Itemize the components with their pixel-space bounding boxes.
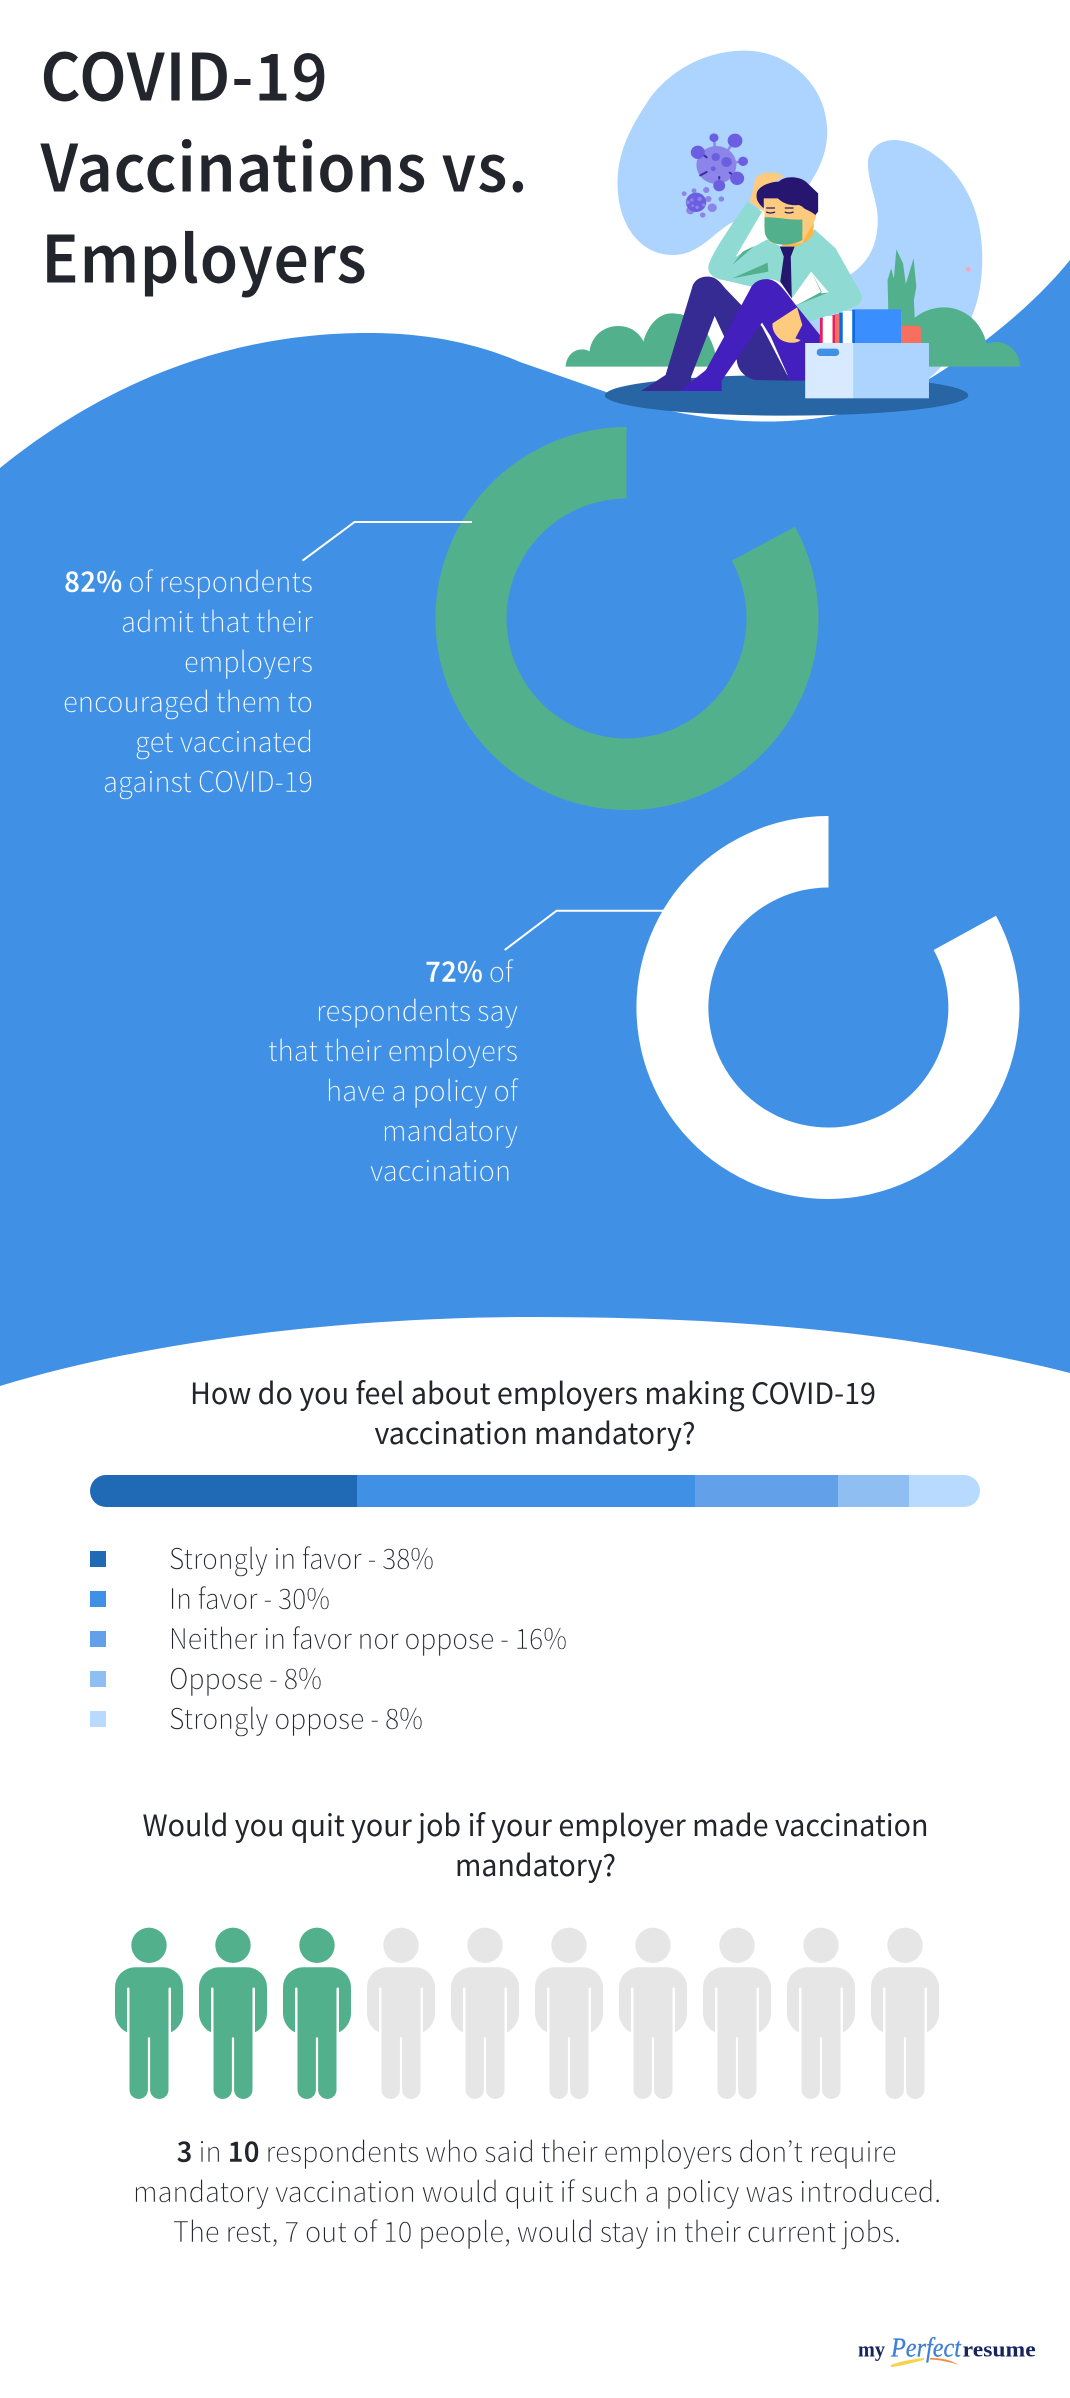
legend: opinion categories: Neither in favor nor oppose - 16% [169, 1617, 567, 1658]
title: COVID-19 [40, 25, 328, 121]
man: face mask [764, 217, 802, 245]
text: 72% statement [268, 950, 519, 1190]
icon: large virus [691, 133, 748, 191]
heading: quit question [142, 1803, 928, 1885]
heading: quit question: Would you quit your job if your employer made vaccination [142, 1803, 928, 1845]
text: 82% statement: get vaccinated [135, 720, 313, 761]
legend: opinion categories [90, 1537, 567, 1738]
text: quit statistics paragraph: The rest, 7 out of 10 people, would stay in their current jobs. [173, 2210, 901, 2251]
icon: bushes [566, 307, 1020, 367]
chart: 72% white donut [636, 816, 1019, 1199]
leader line: 72% [505, 911, 664, 950]
text: 72% statement: have a policy of [326, 1069, 519, 1110]
icon: plant [888, 249, 916, 330]
panel: blue wave background [0, 260, 1070, 1386]
text: 72% statement: 72% of [425, 950, 514, 991]
legend: opinion categories: Strongly in favor - 38% [169, 1537, 434, 1578]
text: 72% statement: that their employers [268, 1029, 518, 1070]
logo: myPerfectResume: my [858, 2337, 885, 2362]
title: Employers [41, 207, 367, 303]
heading: employer mandate question: How do you feel about employers making COVID-19 [190, 1371, 876, 1413]
icon: small virus [682, 187, 724, 218]
man: back leg [641, 277, 790, 391]
man: shirt [708, 202, 862, 324]
text: 72% statement: vaccination [370, 1149, 511, 1190]
logo: myPerfectResume: resume [963, 2337, 1036, 2362]
legend: opinion categories: Strongly oppose - 8% [169, 1697, 423, 1738]
icon: plant pot [901, 326, 921, 343]
chart: 82% green donut [435, 427, 818, 810]
heading: employer mandate question [190, 1371, 876, 1453]
man: face [764, 198, 816, 243]
man: closed eyes [766, 208, 794, 213]
text: 82% statement: admit that their [121, 600, 314, 641]
text: 82% statement: employers [184, 640, 313, 681]
text: 72% statement: mandatory [382, 1109, 518, 1150]
text: 72% statement: respondents say [316, 989, 518, 1030]
legend: opinion categories: Oppose - 8% [169, 1657, 322, 1698]
man: raised hand [750, 173, 784, 212]
text: 82% statement: encouraged them to [63, 680, 313, 721]
chart: 3 in 10 people pictogram [115, 1928, 939, 2099]
illustration: background blobs [618, 51, 982, 378]
man: tie [780, 247, 795, 298]
text: 82% statement: against COVID-19 [103, 760, 313, 801]
icon: man [641, 173, 862, 391]
legend: opinion categories: In favor - 30% [169, 1577, 330, 1618]
logo: myPerfectResume: Perfect [890, 2333, 962, 2363]
leader line: 82% [302, 522, 472, 561]
icon: books [820, 309, 901, 343]
heading: employer mandate question: vaccination mandatory? [374, 1411, 696, 1453]
chart: stacked opinion bar [90, 1475, 980, 1507]
icon: pink dot [966, 267, 971, 272]
title [39, 25, 528, 303]
text: quit statistics paragraph: 3 in 10 respondents who said their employers don’t require [176, 2130, 896, 2171]
man: neck [781, 223, 814, 247]
icon: cardboard box [805, 343, 929, 398]
icon: shadow ellipse [605, 375, 968, 416]
title: Vaccinations vs. [39, 116, 528, 212]
text: quit statistics paragraph: mandatory vaccination would quit if such a policy was introduced. [133, 2170, 941, 2211]
illustration: worried man with box [566, 51, 1020, 416]
text: 82% statement: 82% of respondents [64, 560, 313, 601]
heading: quit question: mandatory? [455, 1843, 616, 1885]
man: hair [757, 177, 818, 215]
text: quit statistics paragraph [133, 2130, 941, 2251]
text: 82% statement [63, 560, 314, 801]
logo: myPerfectResume [858, 2333, 1036, 2367]
man: hand on knee [772, 307, 802, 343]
man: shirt shadows [732, 246, 829, 305]
man: front leg [680, 279, 820, 391]
